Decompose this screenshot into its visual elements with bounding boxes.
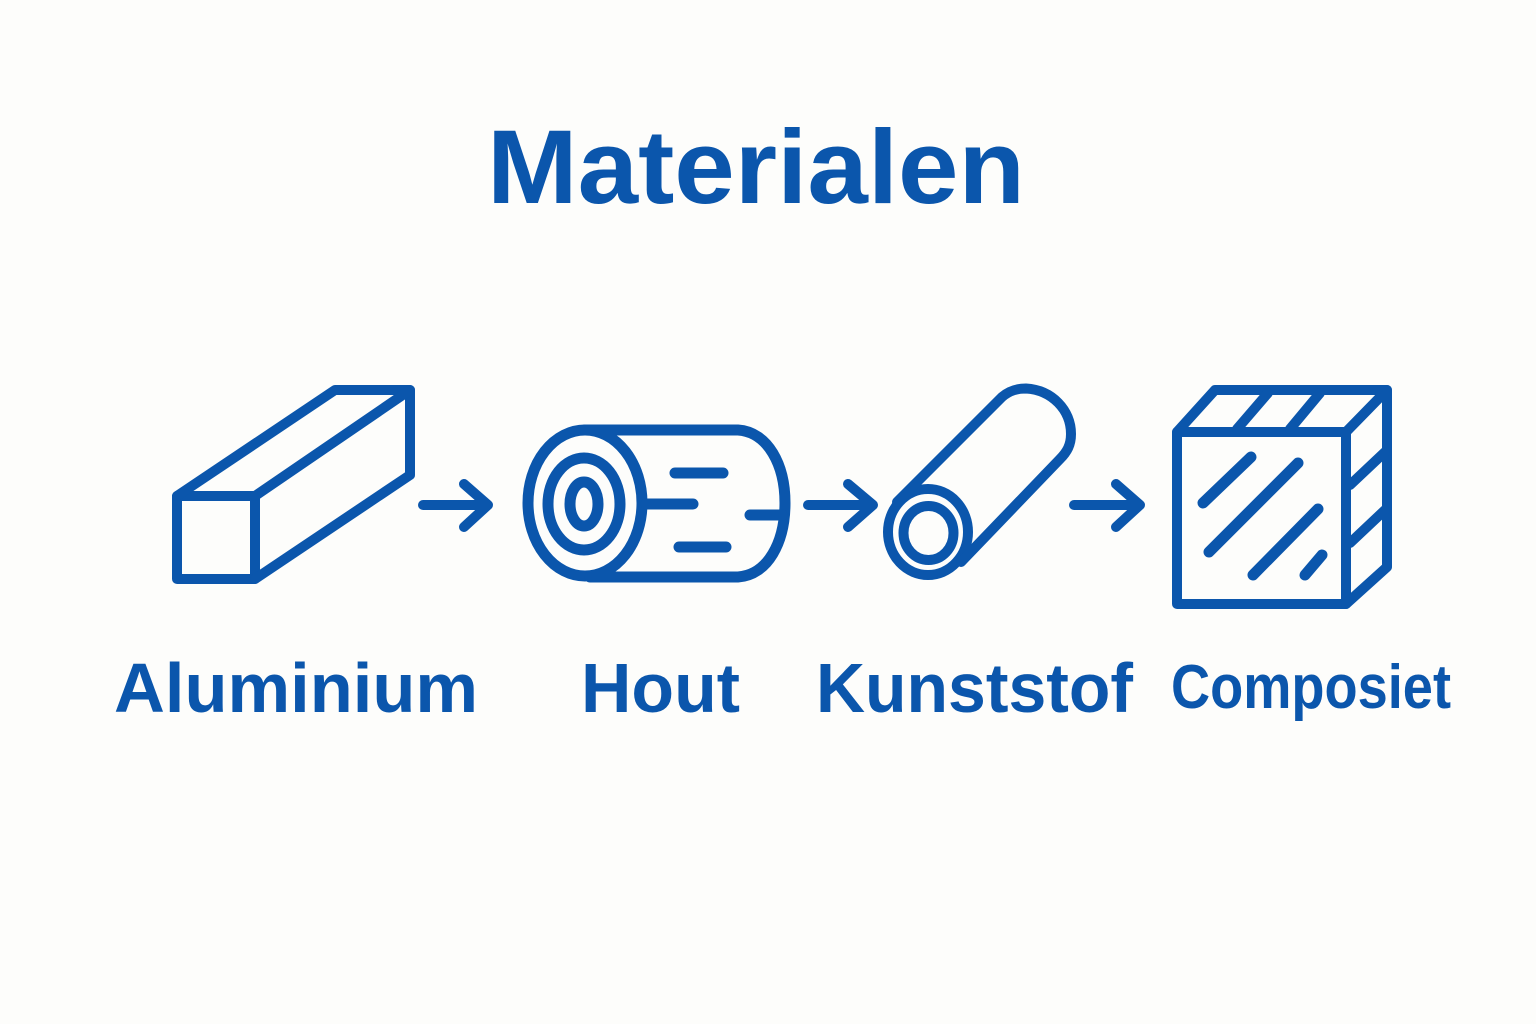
arrow: kunststof to composiet — [1074, 484, 1140, 527]
label: Kunststof: Kunststof — [816, 649, 1134, 727]
icon: composite panel — [1177, 390, 1387, 604]
icon: wooden log — [528, 430, 785, 577]
label: Aluminium: Aluminium — [114, 649, 478, 727]
label: Composiet: Composiet — [1171, 653, 1451, 722]
label: Hout: Hout — [581, 649, 740, 727]
title: Materialen — [487, 109, 1025, 226]
arrow: aluminium to hout — [423, 484, 488, 527]
arrow: hout to kunststof — [808, 484, 873, 527]
icon: aluminium beam — [177, 390, 410, 579]
icon: plastic tube — [888, 388, 1071, 575]
